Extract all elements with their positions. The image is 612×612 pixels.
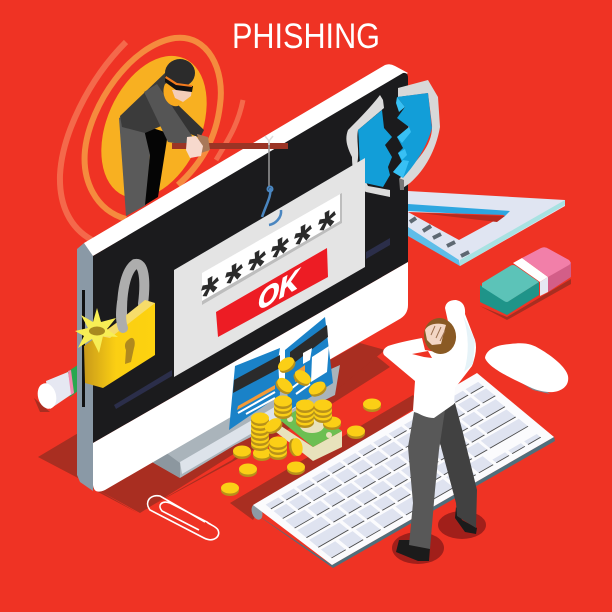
deck [253,373,554,565]
left leg [408,410,445,549]
thief [119,59,204,216]
pencil [35,362,82,411]
keyboard edge [253,437,555,568]
login dialog: OK [258,263,300,317]
OK button [216,248,328,337]
asterisks: * [318,196,337,258]
front leg [143,125,168,205]
hand [425,324,446,345]
left half [346,95,390,197]
roll [250,503,264,521]
head [421,315,459,357]
asterisks: * [201,262,220,324]
burst [75,308,118,353]
side edge [77,243,93,491]
monitor stand [152,365,340,478]
arm near [144,84,192,145]
shoes [396,540,430,561]
screen bars [114,370,172,409]
asterisks: * [271,223,290,285]
shirt and arms [383,300,476,418]
hat [165,59,195,87]
collar and face [163,80,190,106]
title: PHISHING [232,17,380,56]
eraser [480,247,571,315]
foot shadows [392,532,444,564]
padlock [75,264,155,388]
screen [93,73,408,443]
gap under arm [412,351,432,358]
rings and spotlight behind thief [60,38,243,240]
torso [120,72,180,133]
body [84,303,155,388]
monitor [77,64,408,492]
coins [221,354,381,496]
fishing rod and hands [172,134,288,158]
chin [93,262,408,492]
ruler triangle [408,191,565,266]
right leg [430,403,477,528]
keys [266,382,544,558]
right piece [285,317,333,410]
broken credit card [229,317,333,430]
rear leg [119,112,152,216]
top bezel [84,64,408,256]
password field [202,193,342,305]
shield [346,80,440,197]
floor shadows [34,279,571,520]
shackle [122,264,144,328]
login dialog [174,158,365,377]
keyboard [250,373,555,568]
mouse [485,343,568,394]
arm far [170,103,204,138]
asterisks: * [294,210,313,272]
asterisks: * [225,249,244,311]
man [383,300,486,564]
keyhole [125,338,135,364]
paper clip [148,496,219,540]
left piece [229,348,280,430]
asterisks: * [248,236,267,298]
fishing hook [262,136,281,225]
cash bundle [276,405,342,461]
asterisks [201,196,337,324]
slot [82,290,85,407]
right half [398,80,440,190]
